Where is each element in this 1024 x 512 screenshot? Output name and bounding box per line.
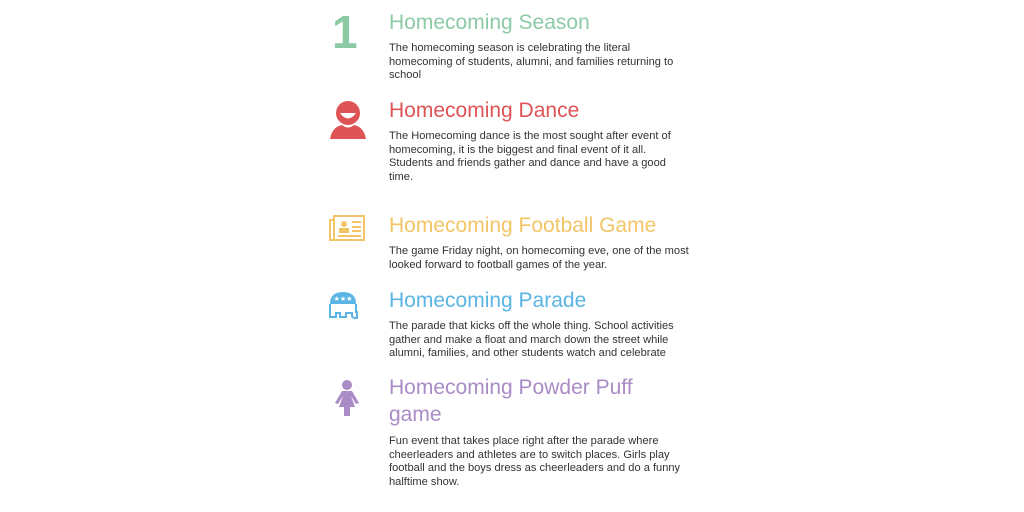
title: powder puff: game [389,403,442,426]
icon: person [330,101,366,139]
icon: elephant [329,292,358,319]
title: season: Homecoming Season [389,11,590,34]
text: powder puff: Fun event that takes place right after the parade where cheerleaders and athletes are to switch places. Girls play football and the boys dress as cheerleaders and do a funny halftime show. [389,435,680,488]
title: powder puff: Homecoming Powder Puff [389,376,633,399]
icon: number 1: 1 [332,6,358,58]
icon: newspaper [329,215,365,241]
text: dance: The Homecoming dance is the most sought after event of homecoming, it is the biggest and final event of it all. [389,130,671,156]
title: powder puff [389,376,633,426]
icon: woman [335,380,359,416]
text: season: The homecoming season is celebrating the literal homecoming of students, alumni, and families returning to school [389,42,673,81]
title: dance: Homecoming Dance [389,99,579,122]
icon: elephant: ★★★ [334,295,352,303]
text: football: The game Friday night, on homecoming eve, one of the most looked forward to football games of the year. [389,245,689,270]
text: dance: Students and friends gather and dance and have a good time. [389,157,666,182]
text: parade: The parade that kicks off the whole thing. School activities gather and make a float and march down the street while alumni, families, and other students watch and celebrate [389,320,674,359]
title: football: Homecoming Football Game [389,214,656,237]
title: parade: Homecoming Parade [389,289,586,312]
text: dance [389,130,671,182]
